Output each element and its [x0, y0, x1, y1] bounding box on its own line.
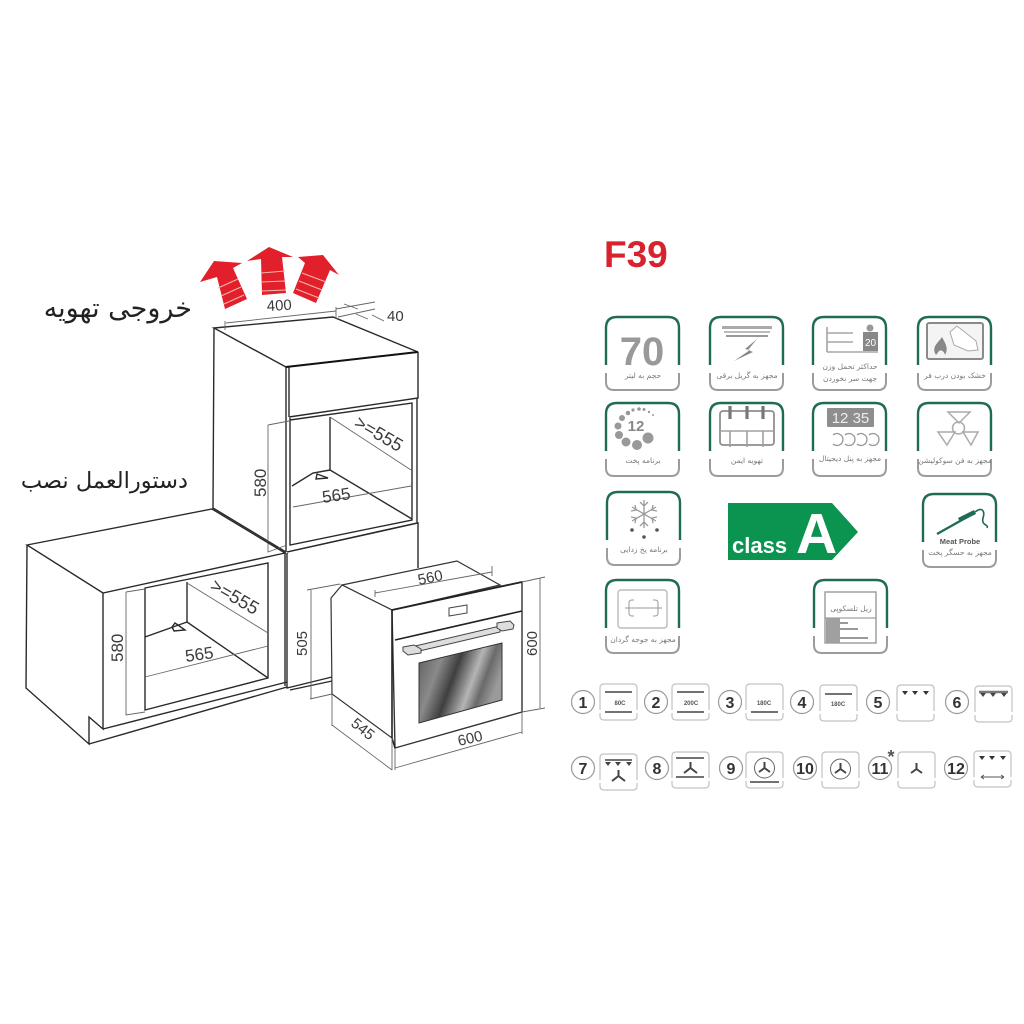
icon: digital panel: 12 35	[832, 410, 869, 427]
icon: door cool touch	[918, 317, 991, 390]
icon: defrost program	[607, 492, 680, 565]
icon: digital panel: مجهز به پنل دیجیتال	[819, 454, 881, 463]
function 1: 1	[579, 695, 588, 712]
icon: capacity 70 litres: حجم به لیتر	[624, 371, 662, 380]
function 4: 4	[798, 695, 807, 712]
function 8: 8	[653, 761, 662, 778]
icon: 12 cooking programs	[606, 403, 679, 476]
icon: electric grill	[710, 317, 783, 390]
badge: energy class A: class	[732, 533, 787, 558]
icon: safe ventilation	[710, 403, 783, 476]
diagram: lower cabinet	[26, 509, 287, 744]
function 1: 80C	[614, 701, 626, 707]
function 11: 11	[872, 761, 889, 778]
icon: circulation fan: مجهز به فن سوکولیشن	[918, 456, 992, 465]
heading: ventilation outlet: خروجی تهویه	[44, 293, 192, 324]
function 11: *	[887, 747, 895, 767]
dimension: 600 height: 600	[524, 631, 541, 656]
function 12: 12	[947, 761, 965, 778]
function 9: 9	[727, 761, 736, 778]
badge: energy class A	[728, 502, 858, 566]
oven handle	[403, 621, 514, 655]
function 2	[644, 684, 709, 720]
icon: telescopic rails	[814, 580, 887, 653]
icon: 12 cooking programs: برنامه پخت	[625, 456, 661, 465]
function 3: 180C	[757, 701, 772, 707]
diagram: middle cabinet	[285, 523, 418, 699]
icon: digital panel	[813, 403, 886, 476]
dimension: 565 lower: 565	[184, 643, 215, 666]
function 1	[572, 684, 637, 720]
function 2: 2	[652, 695, 661, 712]
dimension: 40: 40	[387, 308, 404, 325]
dimension: 505: 505	[294, 631, 311, 656]
function 7: 7	[579, 761, 588, 778]
function 10	[794, 752, 859, 788]
function 4	[790, 685, 857, 721]
function 5	[866, 685, 934, 721]
icon: circulation fan	[918, 403, 992, 476]
dimension: 560: 560	[416, 567, 444, 589]
icon: meat probe: مجهز به حسگر پخت	[928, 548, 992, 557]
function 9	[720, 752, 783, 788]
icon: red ventilation arrows	[200, 247, 339, 309]
function 6	[946, 686, 1012, 722]
dimension: 580 upper: 580	[251, 469, 270, 497]
icon: maximum weight: 20	[865, 338, 876, 349]
function 7	[572, 754, 637, 790]
icon: meat probe	[923, 494, 996, 567]
function 4: 180C	[831, 702, 846, 708]
function 12	[944, 751, 1011, 787]
dimension: 580 lower: 580	[108, 634, 127, 662]
function 8	[646, 752, 709, 788]
function 2: 200C	[684, 701, 699, 707]
icon: defrost program: برنامه یخ زدایی	[620, 545, 668, 554]
dimension: 555 lower: >=555	[207, 574, 263, 619]
icon: maximum weight: حداکثر تحمل وزن	[822, 362, 878, 371]
function 10: 10	[796, 761, 814, 778]
icon: maximum weight	[813, 317, 886, 390]
icon: safe ventilation: تهویه ایمن	[731, 456, 763, 465]
function 11	[868, 747, 935, 788]
icon: capacity 70 litres: 70	[620, 330, 664, 374]
diagram: upper cabinet	[213, 297, 418, 552]
icon: rotisserie	[606, 580, 679, 653]
icon: door cool touch: خشک بودن درب فر	[923, 371, 986, 380]
function 3: 3	[726, 695, 735, 712]
dimension: 400: 400	[266, 297, 292, 315]
dimension: 600 width: 600	[456, 728, 484, 750]
function 5: 5	[874, 695, 883, 712]
function 3	[718, 684, 783, 720]
icon: capacity 70 litres	[606, 317, 679, 390]
icon: rotisserie: مجهز به جوجه گردان	[610, 635, 676, 644]
oven display	[449, 605, 467, 616]
function 6: 6	[953, 695, 962, 712]
icon: maximum weight: جهت سر نخوردن	[823, 374, 877, 383]
icon: meat probe: Meat Probe	[940, 537, 980, 546]
heading: installation instructions: دستورالعمل نصب	[21, 468, 188, 494]
dimension: 555 upper: >=555	[351, 411, 407, 456]
dimension: 545: 545	[347, 715, 378, 744]
icon: telescopic rails: ریل تلسکوپی	[830, 604, 872, 613]
diagram: built-in oven	[331, 561, 545, 770]
badge: energy class A: A	[796, 502, 837, 566]
icon: electric grill: مجهز به گریل برقی	[716, 371, 778, 380]
dimension: 565 upper: 565	[321, 484, 352, 507]
icon: 12 cooking programs: 12	[628, 418, 644, 435]
oven window	[419, 643, 502, 723]
title: model name: F39	[604, 234, 668, 275]
